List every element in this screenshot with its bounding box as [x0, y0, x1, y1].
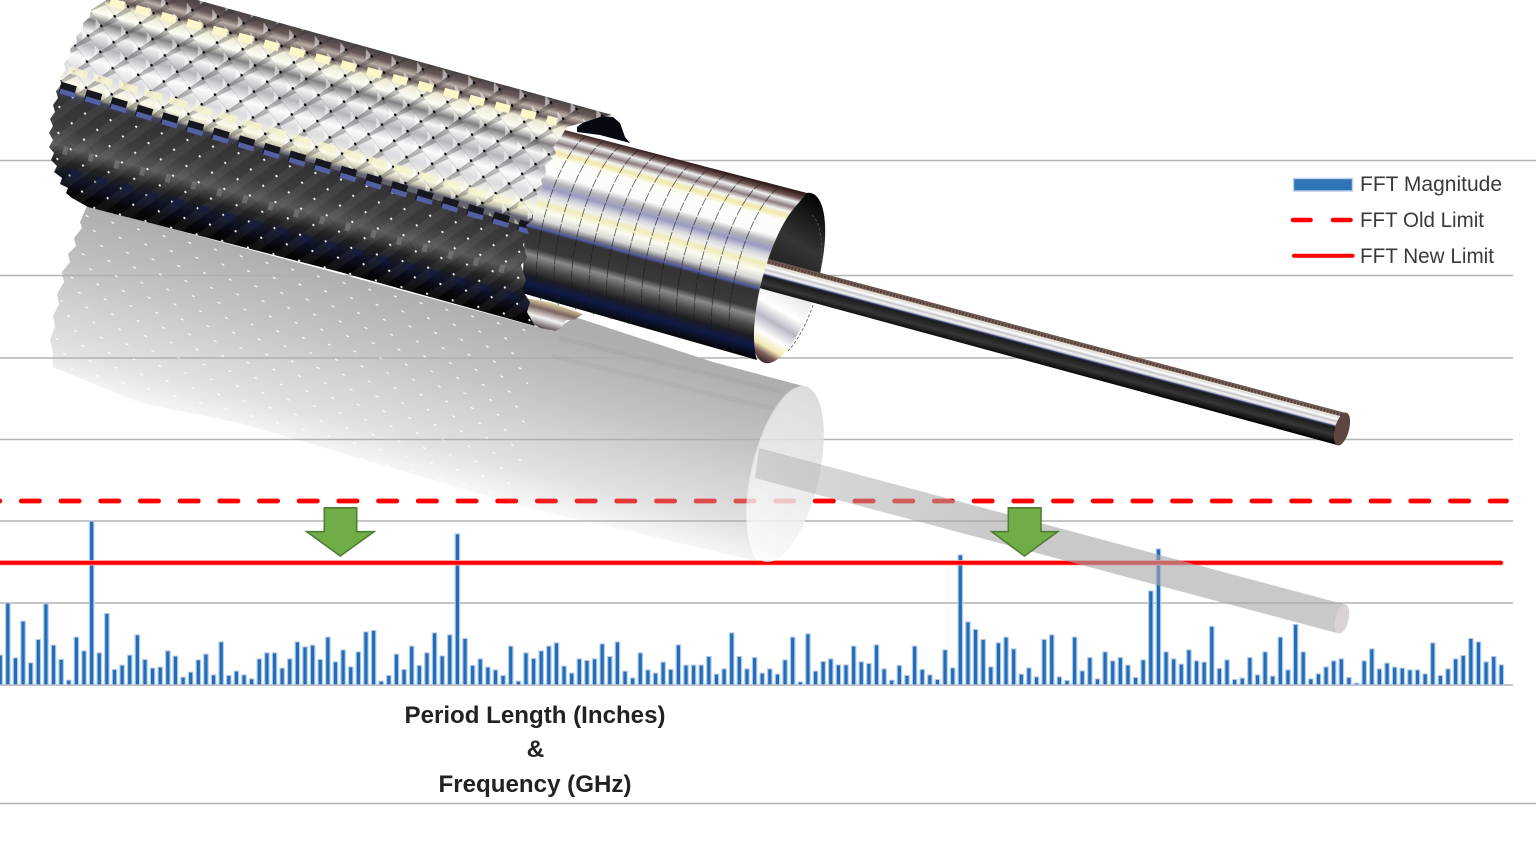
arrow: left green down arrow	[307, 508, 374, 556]
legend	[1293, 173, 1502, 268]
legend: FFT old limit label: FFT Old Limit	[1360, 209, 1484, 232]
legend: new limit line	[1294, 254, 1352, 258]
cable: coaxial cable illustration	[0, 0, 1353, 447]
cable: braid near-side flare	[526, 298, 583, 331]
axis title: period length: Period Length (Inches)	[404, 702, 666, 729]
reflection: tube opening	[732, 379, 838, 569]
bar chart: FFT magnitude	[0, 521, 1501, 685]
cable: braid far-side flap	[577, 115, 630, 143]
cable: metal shield tube	[522, 121, 807, 360]
legend: old limit dashes	[1293, 218, 1350, 222]
cable: woven braid jacket	[49, 0, 612, 326]
cable: rod end cap	[1331, 411, 1353, 447]
cable: tube ring lines	[537, 136, 778, 352]
cable: centre conductor rod	[730, 250, 1346, 445]
cable: tube interior opening	[736, 185, 840, 371]
chart grid lines	[0, 160, 1536, 804]
cable reflection	[50, 206, 1352, 635]
reflection: rod	[755, 448, 1347, 633]
axis title	[404, 702, 666, 798]
legend: FFT magnitude label: FFT Magnitude	[1360, 173, 1502, 196]
cable: inner dashed ring	[788, 215, 822, 351]
legend: FFT magnitude swatch	[1294, 178, 1352, 191]
legend: FFT new limit label: FFT New Limit	[1360, 245, 1494, 268]
axis title: frequency: Frequency (GHz)	[438, 771, 632, 798]
line: FFT old limit (dashed)	[0, 499, 1506, 503]
reflection: braid and tube	[50, 206, 803, 566]
cable: rod copper edge	[765, 261, 1344, 416]
axis title: ampersand: &	[527, 736, 544, 763]
line: FFT new limit (solid)	[0, 560, 1501, 565]
arrow: right green down arrow	[992, 508, 1058, 556]
reflection: rod end cap	[1332, 603, 1352, 635]
